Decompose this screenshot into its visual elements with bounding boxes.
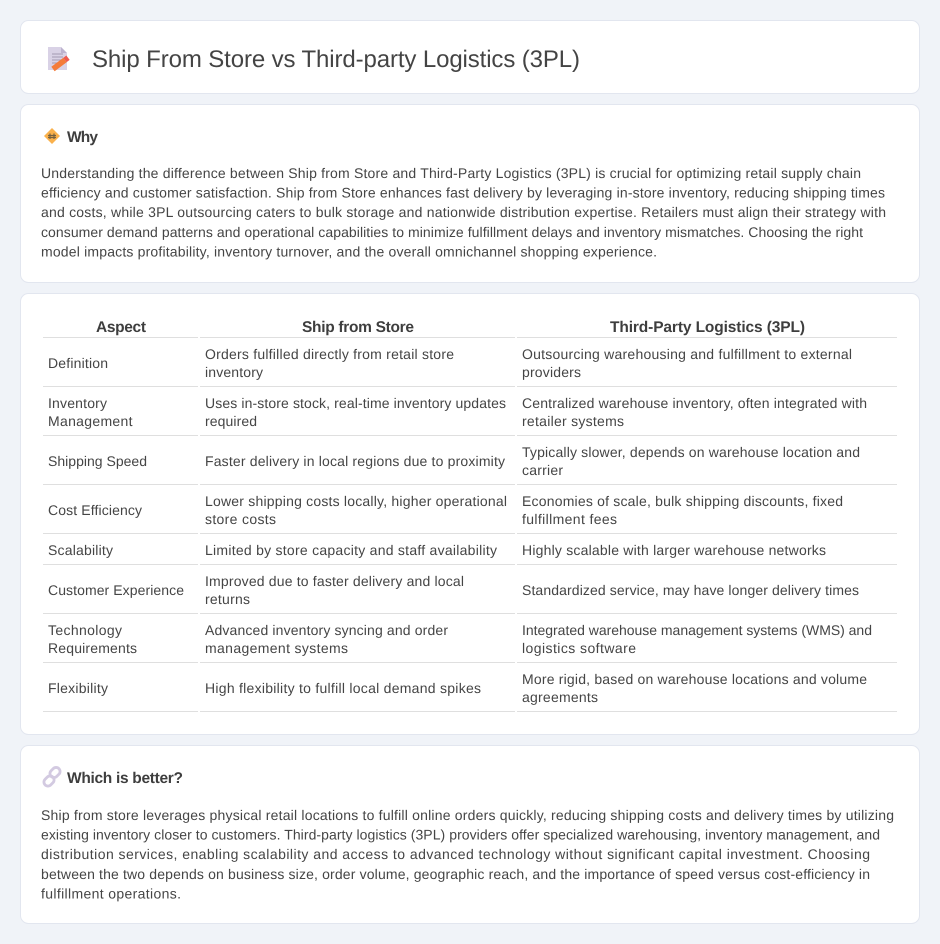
text block: why paragraph: efficiency and customer satisfaction. Ship from Store enhances fast delivery by leveraging in-store inventory, reducing shipping times: [41, 185, 885, 201]
row: scalability: Limited by store capacity and staff availability: [205, 542, 497, 558]
heading: why: Why: [67, 129, 98, 146]
row: cost efficiency: [43, 493, 897, 534]
row: inventory management: [43, 395, 897, 436]
row: technology requirements: Technology: [48, 622, 122, 638]
row: definition: [43, 346, 897, 387]
text block: which is better paragraph: between the two depends on business size, order volume, geographic reach, and the importance of speed versus cost-efficiency in: [41, 866, 870, 882]
row: inventory management: Inventory: [48, 395, 107, 411]
icon: document with pencil: [48, 47, 68, 70]
text block: which is better paragraph: existing inventory closer to customers. Third-party logistics (3PL) providers offer specialized warehousing, inventory management, and: [41, 827, 880, 843]
row: technology requirements: management systems: [205, 640, 348, 656]
row: customer experience: returns: [205, 591, 250, 607]
row: scalability: [43, 542, 897, 565]
row: flexibility: agreements: [522, 689, 598, 705]
row: scalability: Scalability: [48, 542, 113, 558]
row: cost efficiency: Cost Efficiency: [48, 502, 142, 518]
row: flexibility: [43, 671, 897, 712]
text block: why paragraph: Understanding the difference between Ship from Store and Third-Party Logistics (3PL) is crucial for optimizing retail supply chain: [41, 165, 861, 181]
row: definition: Definition: [48, 355, 108, 371]
row: technology requirements: [43, 622, 897, 663]
row: shipping speed: Typically slower, depends on warehouse location and: [522, 444, 860, 460]
heading: which is better: Which is better?: [67, 770, 183, 787]
row: inventory management: Centralized warehouse inventory, often integrated with: [522, 395, 867, 411]
title: Ship From Store vs Third-party Logistics (3PL): [92, 46, 580, 73]
row: inventory management: required: [205, 413, 257, 429]
row: technology requirements: Requirements: [48, 640, 137, 656]
row: cost efficiency: store costs: [205, 511, 276, 527]
row: shipping speed: Shipping Speed: [48, 453, 147, 469]
row: definition: Outsourcing warehousing and fulfillment to external: [522, 346, 852, 362]
row: inventory management: Management: [48, 413, 133, 429]
text block: why paragraph: model impacts profitability, inventory turnover, and the overall omnichannel shopping experience.: [41, 243, 657, 259]
row: definition: inventory: [205, 364, 263, 380]
row: definition: Orders fulfilled directly from retail store: [205, 346, 454, 362]
panel: comparison table: [20, 294, 920, 734]
row: cost efficiency: fulfillment fees: [522, 511, 617, 527]
row: customer experience: Standardized service, may have longer delivery times: [522, 582, 859, 598]
row: definition: providers: [522, 364, 581, 380]
row: shipping speed: Faster delivery in local regions due to proximity: [205, 453, 505, 469]
text block: why paragraph: and costs, while 3PL outsourcing caters to bulk storage and nationwide distribution expertise. Retailers must align their strategy with: [41, 204, 886, 220]
icon: warning diamond: [44, 128, 60, 144]
row: cost efficiency: Economies of scale, bulk shipping discounts, fixed: [522, 493, 843, 509]
panel: which is better: [20, 746, 920, 924]
text block: why paragraph: [41, 165, 886, 259]
panel: title card: [20, 20, 920, 94]
text block: why paragraph: consumer demand patterns and operational capabilities to minimize fulfillment delays and inventory mismatches. Choosing the right: [41, 224, 863, 240]
text block: which is better paragraph: Ship from store leverages physical retail locations to fulfill online orders quickly, reducing shipping costs and delivery times by utilizing: [41, 807, 894, 823]
row: technology requirements: logistics software: [522, 640, 636, 656]
text block: which is better paragraph: [41, 807, 894, 901]
row: technology requirements: Advanced inventory syncing and order: [205, 622, 448, 638]
panel: why: [20, 104, 920, 282]
row: inventory management: Uses in-store stock, real-time inventory updates: [205, 395, 506, 411]
row: customer experience: Improved due to faster delivery and local: [205, 573, 464, 589]
table header row: [43, 319, 897, 338]
icon: chain link: [42, 766, 62, 788]
row: technology requirements: Integrated warehouse management systems (WMS) and: [522, 622, 872, 638]
table header row: Third-Party Logistics (3PL): [610, 319, 805, 336]
row: flexibility: Flexibility: [48, 680, 108, 696]
row: shipping speed: [43, 444, 897, 485]
row: customer experience: Customer Experience: [48, 582, 184, 598]
row: customer experience: [43, 573, 897, 614]
row: shipping speed: carrier: [522, 462, 563, 478]
row: cost efficiency: Lower shipping costs locally, higher operational: [205, 493, 507, 509]
row: inventory management: retailer systems: [522, 413, 624, 429]
table header row: Ship from Store: [302, 319, 414, 336]
row: flexibility: More rigid, based on warehouse locations and volume: [522, 671, 867, 687]
row: scalability: Highly scalable with larger warehouse networks: [522, 542, 826, 558]
table header row: Aspect: [96, 319, 146, 336]
text block: which is better paragraph: distribution services, enabling scalability and access to advanced technology without significant capital investment. Choosing: [41, 846, 870, 862]
row: flexibility: High flexibility to fulfill local demand spikes: [205, 680, 481, 696]
text block: which is better paragraph: fulfillment operations.: [41, 885, 181, 901]
